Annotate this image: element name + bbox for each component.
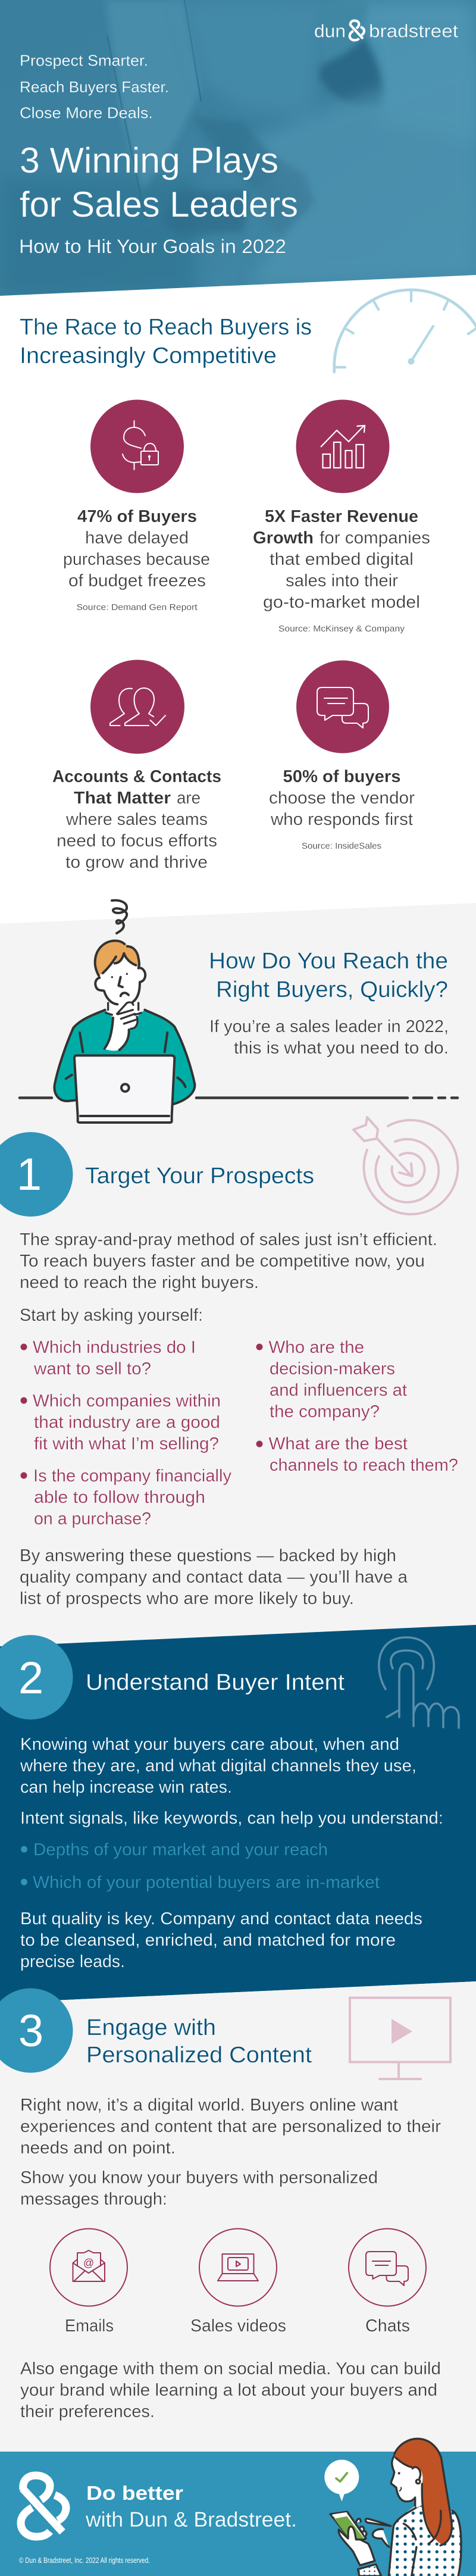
bullet list: questions left: want to sell to? <box>33 1359 151 1378</box>
bullet list: questions right: channels to reach them? <box>270 1456 458 1475</box>
closing text: But quality is key. Company and contact data needs <box>20 1909 422 1928</box>
illustration: thinking man with laptop <box>54 901 195 1123</box>
text: need to focus efforts <box>57 831 217 851</box>
text: where sales teams <box>65 810 208 829</box>
section 2: understand buyer intent <box>0 1625 476 2003</box>
heading: race to reach buyers: The Race to Reach Buyers is <box>20 315 312 340</box>
closing text <box>20 1909 422 1971</box>
text <box>269 767 415 851</box>
text: go-to-market model <box>263 593 420 612</box>
number badge 3: 3 <box>18 2006 43 2056</box>
bullet list: questions left: Which companies within <box>33 1392 221 1411</box>
bullet list: questions left: Is the company financially <box>33 1467 231 1486</box>
heading <box>86 2015 312 2068</box>
bullet list: questions right: What are the best <box>269 1434 408 1453</box>
logo: ampersand mark <box>21 2475 66 2537</box>
body text: messages through: <box>20 2190 167 2209</box>
body text <box>20 2096 441 2209</box>
number badge 3 <box>0 1988 73 2072</box>
body text: Start by asking yourself: <box>20 1306 203 1325</box>
text: if you're a sales leader <box>209 1017 449 1058</box>
panel: hero header <box>0 0 476 298</box>
tagline: Reach Buyers Faster. <box>20 78 169 96</box>
body text: Knowing what your buyers care about, when and <box>20 1735 399 1754</box>
bullet list: questions right <box>256 1338 458 1475</box>
closing text: your brand while learning a lot about your buyers and <box>20 2381 437 2400</box>
holding hand <box>339 2527 375 2565</box>
text <box>63 507 210 612</box>
section 3: engage with personalized content <box>0 1981 476 2452</box>
text: 47% of Buyers <box>77 507 197 526</box>
bullet list: questions left: on a purchase? <box>34 1509 151 1528</box>
illustration: woman with phone <box>324 2439 461 2576</box>
closing text: list of prospects who are more likely to buy. <box>20 1589 354 1608</box>
panel background <box>0 1625 476 2003</box>
text: sales into their <box>286 571 398 590</box>
text: for companies <box>320 529 430 548</box>
body text: The spray-and-pray method of sales just isn’t efficient. <box>20 1230 437 1249</box>
squiggle <box>112 901 127 933</box>
channel: chats: Chats <box>365 2316 410 2336</box>
channel: emails: Emails <box>65 2316 114 2336</box>
section 1: target your prospects <box>0 1117 458 1608</box>
text: Source: InsideSales <box>302 841 381 851</box>
heading: Target Your Prospects <box>85 1164 314 1189</box>
icon: two people with check <box>90 659 184 754</box>
body text: Show you know your buyers with personalized <box>20 2168 378 2187</box>
call to action text: with Dun & Bradstreet. <box>85 2508 297 2531</box>
logo: dun & bradstreet <box>314 20 458 42</box>
text: purchases because <box>63 550 210 569</box>
body text <box>20 1230 437 1325</box>
closing text <box>20 2359 441 2421</box>
text: Growth <box>253 529 314 548</box>
bullet list: questions right: Who are the <box>269 1338 364 1357</box>
text: of budget freezes <box>68 571 206 590</box>
channel: sales videos: Sales videos <box>190 2316 286 2336</box>
text: that embed digital <box>270 550 414 569</box>
panel background <box>0 1981 476 2452</box>
bullet list: questions right: decision-makers <box>270 1359 395 1378</box>
icon: small chat bubbles <box>349 2228 426 2306</box>
heading: Personalized Content <box>86 2043 312 2068</box>
tagline: Close More Deals. <box>20 104 153 121</box>
closing text: By answering these questions — backed by high <box>20 1546 396 1565</box>
divider line <box>20 1096 458 1099</box>
text: if you're a sales leader: this is what you need to do. <box>234 1039 449 1058</box>
text: are <box>177 789 201 808</box>
copyright: © Dun & Bradstreet, Inc. 2022 All rights reserved. <box>19 2556 150 2565</box>
speech bubble with check <box>324 2460 359 2502</box>
body text: experiences and content that are personalized to their <box>20 2117 441 2136</box>
body text <box>20 1735 443 1828</box>
icon: speedometer gauge <box>334 290 476 372</box>
icon: rising bar chart <box>296 400 389 493</box>
text: Source: Demand Gen Report <box>77 602 198 612</box>
sleeve <box>358 2564 381 2576</box>
bullet list: questions right: and influencers at <box>270 1381 407 1400</box>
bullet list: intent signals <box>21 1840 380 1892</box>
body text: where they are, and what digital channels they use, <box>20 1756 416 1775</box>
number badge 2: 2 <box>18 1653 43 1703</box>
title <box>20 140 298 224</box>
icon: chat bubbles <box>296 661 389 754</box>
bullet list: questions left: able to follow through <box>34 1488 205 1507</box>
icon: envelope <box>50 2228 127 2306</box>
icon: video monitor <box>350 1997 450 2079</box>
title: 3 Winning Plays <box>20 140 278 180</box>
heading: how do you reach: Right Buyers, Quickly? <box>216 977 448 1002</box>
body text: need to reach the right buyers. <box>20 1273 259 1292</box>
subtitle: How to Hit Your Goals in 2022 <box>19 236 286 257</box>
text: Source: McKinsey & Company <box>278 624 405 634</box>
text <box>253 507 430 634</box>
heading: Understand Buyer Intent <box>86 1670 345 1695</box>
phone <box>330 2512 367 2540</box>
pointing hand <box>365 2519 391 2547</box>
body text: To reach buyers faster and be competitive now, you <box>20 1252 425 1271</box>
channel: sales videos <box>190 2228 286 2336</box>
hero photo background <box>0 0 476 298</box>
text: if you're a sales leader: If you’re a sales leader in 2022, <box>209 1017 449 1036</box>
bullet list: questions right: the company? <box>270 1402 380 1421</box>
title: for Sales Leaders <box>20 185 298 224</box>
heading: how do you reach <box>209 949 448 1002</box>
body text: Right now, it’s a digital world. Buyers online want <box>20 2096 398 2115</box>
logo: dun & bradstreet: dun <box>314 20 346 42</box>
closing text: precise leads. <box>20 1952 125 1971</box>
body text: needs and on point. <box>20 2139 176 2158</box>
tagline <box>20 52 169 121</box>
man figure <box>54 940 195 1123</box>
icon: tapping hand <box>379 1637 459 1728</box>
stat: 50% of buyers <box>269 661 415 851</box>
bullet list: questions left: fit with what I’m selling? <box>34 1434 219 1453</box>
channel: chats <box>349 2228 426 2336</box>
panel: how do you reach + section 1 background <box>0 903 476 1646</box>
tagline: Prospect Smarter. <box>20 52 148 70</box>
number badge 2 <box>0 1635 73 1720</box>
closing text: to be cleansed, enriched, and matched for more <box>20 1931 396 1950</box>
text: who responds first <box>270 810 413 829</box>
text: That Matter <box>74 789 171 808</box>
call to action text <box>85 2482 297 2531</box>
icon: laptop video <box>199 2228 277 2306</box>
bullet list: intent signals: Depths of your market and your reach <box>33 1840 328 1859</box>
icon: envelope: @ <box>83 2257 94 2269</box>
bullet list: questions left: that industry are a good <box>34 1413 220 1432</box>
heading: Engage with <box>86 2015 216 2040</box>
text: 5X Faster Revenue <box>265 507 418 526</box>
text: to grow and thrive <box>65 853 208 872</box>
icon: ampersand mark <box>350 21 364 40</box>
stat: 5X faster revenue growth <box>253 400 430 634</box>
number badge 1 <box>0 1132 73 1217</box>
bullet list: questions left: Which industries do I <box>33 1338 196 1357</box>
text <box>52 767 221 872</box>
heading: race to reach buyers: Increasingly Competitive <box>20 343 277 368</box>
call to action text: Do better <box>86 2482 183 2504</box>
text: 50% of buyers <box>283 767 401 786</box>
stat: 47% of buyers <box>63 400 210 612</box>
body text: Intent signals, like keywords, can help you understand: <box>20 1809 443 1828</box>
text: have delayed <box>85 529 189 548</box>
text: choose the vendor <box>269 789 415 808</box>
panel: footer call to action <box>0 2439 476 2576</box>
icon: dollar with padlock <box>90 400 184 493</box>
closing text: quality company and contact data — you’ll have a <box>20 1568 408 1587</box>
body text: can help increase win rates. <box>20 1778 232 1797</box>
number badge 1: 1 <box>17 1149 42 1200</box>
bullet list: intent signals: Which of your potential buyers are in-market <box>33 1873 380 1892</box>
heading: race to reach buyers <box>20 315 312 368</box>
closing text: their preferences. <box>20 2402 155 2421</box>
channel: emails <box>50 2228 127 2336</box>
bullet list: questions left <box>20 1338 231 1528</box>
stat: accounts and contacts <box>52 659 221 872</box>
closing text: Also engage with them on social media. You can build <box>20 2359 441 2378</box>
logo: dun & bradstreet: bradstreet <box>369 20 458 42</box>
closing text <box>20 1546 408 1608</box>
text: Accounts & Contacts <box>52 767 221 786</box>
heading: how do you reach: How Do You Reach the <box>209 949 448 974</box>
icon: target with arrow <box>353 1117 458 1214</box>
